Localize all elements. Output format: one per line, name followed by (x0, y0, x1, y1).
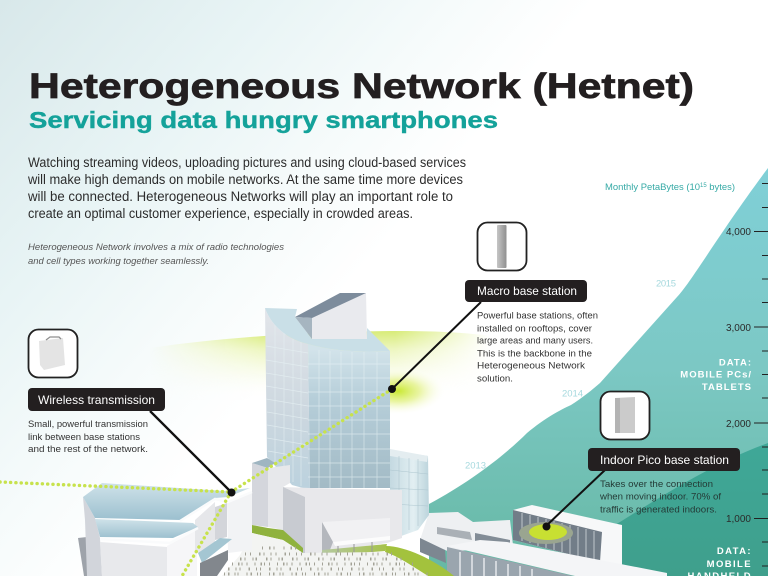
intro paragraph: will be connected. Heterogeneous Networks will play an important role to (27, 189, 453, 204)
description: macro base station: Powerful base stations, often (477, 310, 598, 320)
roof edge trim (100, 492, 252, 543)
left building lower roof (95, 519, 198, 538)
axis unit label: bytes) (707, 182, 735, 193)
callout: wireless transmission (28, 330, 236, 496)
main tower (265, 293, 390, 490)
description: wireless transmission: and the rest of the network. (28, 444, 148, 454)
axis value labels: 2,000 (726, 419, 751, 430)
description: macro base station: large areas and many users. (477, 336, 593, 346)
intro paragraph: will make high demands on mobile networks. At the same time more devices (27, 172, 463, 187)
year labels: 2013 (465, 460, 486, 472)
label: indoor pico base station: Indoor Pico base station (600, 453, 729, 467)
description: macro base station: This is the backbone in the (477, 348, 592, 358)
leader line and dot (150, 411, 236, 496)
series label: mobile handheld (687, 546, 752, 576)
city illustration (78, 293, 667, 576)
axis ticks (754, 184, 768, 566)
description: indoor pico base station (599, 479, 722, 514)
green band under canopy (322, 544, 387, 556)
label: indoor pico base station (588, 448, 740, 471)
description: wireless transmission: link between base stations (28, 432, 141, 442)
italic note: and cell types working together seamlessly. (28, 256, 209, 267)
year labels: 2014 (562, 388, 583, 400)
small canopy (198, 538, 232, 563)
description: wireless transmission: Small, powerful transmission (28, 419, 148, 429)
green ground glow behind buildings (163, 331, 483, 382)
label: macro base station (465, 280, 587, 302)
intro paragraph: create an optimal customer experience, especially in crowded areas. (28, 206, 413, 221)
italic note (28, 242, 284, 267)
radio coverage glow at macro station (350, 367, 446, 415)
left fin (78, 537, 93, 576)
callout: indoor pico base station (542, 392, 740, 530)
description: indoor pico base station: Takes over the connection (600, 479, 713, 489)
axis value labels: 3,000 (726, 323, 751, 334)
series label: mobile PCs/tablets: TABLETS (702, 382, 752, 393)
description: macro base station: Heterogeneous Network (477, 360, 586, 370)
leader line and dot (542, 470, 605, 530)
series label: mobile PCs/tablets (680, 358, 752, 393)
left building tall edge (83, 497, 102, 576)
tower window grid (266, 325, 390, 488)
axis value labels (726, 227, 751, 525)
green lawn right (385, 546, 454, 576)
description: wireless transmission (28, 419, 148, 454)
description: macro base station (477, 310, 598, 384)
data area: mobile PCs and tablets (429, 168, 768, 576)
italic note: Heterogeneous Network involves a mix of radio technologies (28, 242, 284, 253)
description: macro base station: solution. (477, 374, 513, 384)
leader line and dot (388, 302, 481, 393)
subtitle: Servicing data hungry smartphones (29, 107, 498, 133)
podium and entrance (283, 487, 402, 556)
left building front walls (100, 542, 167, 576)
cylinder building (390, 449, 429, 540)
description: indoor pico base station: traffic is generated indoors. (600, 504, 717, 514)
label: macro base station: Macro base station (477, 284, 577, 298)
intro paragraph (27, 155, 466, 221)
data area: mobile handheld (600, 443, 768, 576)
title: Heterogeneous Network (Hetnet) (29, 67, 694, 106)
series label: mobile handheld: DATA: (717, 546, 752, 557)
description: macro base station: installed on rooftops, cover (477, 324, 592, 334)
dotted wireless links (0, 389, 392, 576)
series label: mobile handheld: MOBILE (707, 559, 752, 570)
tower roof (265, 308, 390, 351)
callout: macro base station (388, 222, 598, 393)
icon: pico unit (600, 392, 650, 440)
icon: wireless transmission unit (28, 330, 78, 378)
label: wireless transmission (28, 388, 165, 411)
intro paragraph: Watching streaming videos, uploading pictures and using cloud-based services (28, 155, 466, 170)
tower glass curved left side (265, 308, 310, 490)
annex block (252, 458, 290, 530)
plaza with crowd (222, 533, 428, 576)
right low-rise buildings (420, 505, 667, 576)
year labels (465, 278, 676, 472)
left building upper roof (83, 483, 250, 520)
series label: mobile PCs/tablets: DATA: (719, 358, 752, 368)
tower roof wedge (312, 293, 367, 339)
icon: indoor coverage glow (519, 522, 573, 544)
axis unit label: 15 (700, 183, 707, 189)
area chart: monthly mobile data traffic (429, 168, 768, 576)
green slope (252, 525, 303, 553)
series label: mobile PCs/tablets: MOBILE PCs/ (680, 370, 752, 380)
icon: macro antenna (478, 222, 526, 270)
axis value labels: 4,000 (726, 227, 751, 238)
left convention building (78, 483, 252, 576)
year labels: 2015 (656, 278, 676, 290)
tower glass front (308, 344, 390, 488)
axis unit label: Monthly PetaBytes (10 (605, 182, 701, 193)
description: indoor pico base station: when moving indoor. 70% of (599, 492, 722, 502)
label: wireless transmission: Wireless transmission (38, 393, 155, 407)
axis value labels: 1,000 (726, 514, 751, 525)
